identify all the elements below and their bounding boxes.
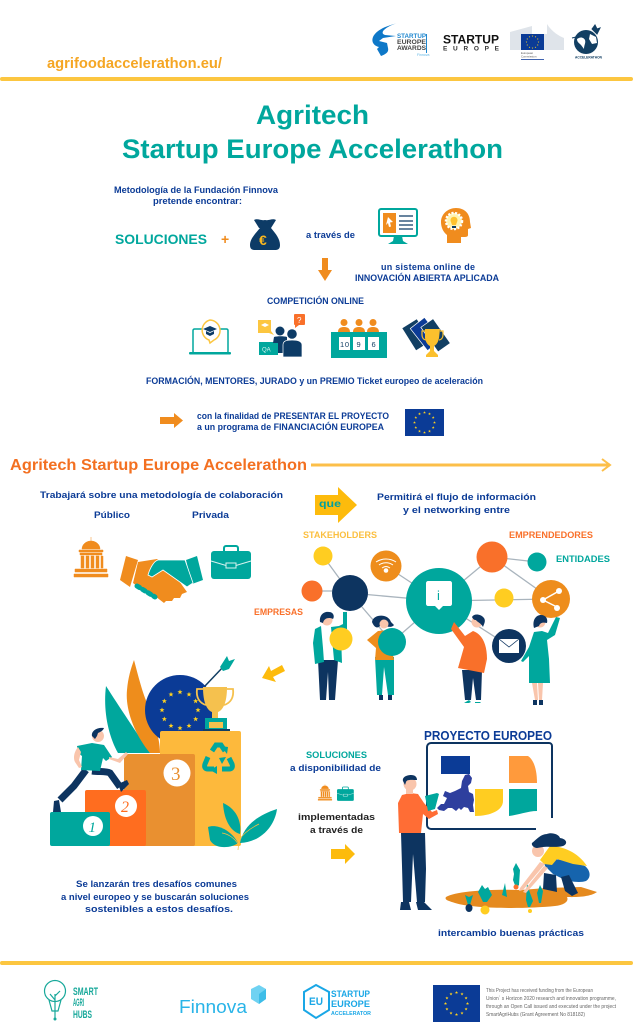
node: mail (492, 629, 526, 663)
person: man in orange (451, 614, 487, 703)
node: share (532, 580, 570, 618)
logo: Smart Agri Hubs: HUBS (73, 1009, 92, 1021)
logo: Smart Agri Hubs: SMART (73, 986, 98, 998)
title: Startup Europe Accelerathon (122, 134, 503, 164)
arrow: que: que (319, 498, 341, 510)
icon: EU flag (405, 409, 444, 436)
bottom divider (0, 961, 633, 965)
logo: Startup Europe Awards: EUROPE (397, 39, 426, 46)
icon: handshake (120, 556, 203, 603)
icon: jury scoreboard: 6 (372, 340, 376, 349)
leaf: teal (105, 686, 150, 753)
funding notice: SmartAgriHubs (Grant Agreement No 818182) (486, 1012, 585, 1018)
text: information flow: y el networking entre (403, 505, 510, 515)
funding notice (486, 988, 616, 1018)
text: collaboration methodology (40, 490, 283, 520)
step: 2: 2 (121, 799, 129, 816)
logo: Startup Europe Awards: Finnova (417, 53, 430, 57)
logo: Startup Europe Accelerator: EU (309, 996, 323, 1008)
top divider (0, 77, 633, 81)
icon: trophy with tickets (402, 317, 450, 357)
person: runner (53, 728, 129, 812)
icon: jury scoreboard (331, 319, 387, 358)
header logos (372, 23, 603, 60)
step: 3 (124, 754, 195, 846)
map of Europe (437, 774, 474, 812)
icon: jury scoreboard: 10 (340, 340, 349, 349)
text: information flow (377, 492, 536, 515)
person: gardener (519, 833, 590, 896)
network diagram (302, 542, 570, 663)
logo: European Commission (510, 24, 564, 60)
person: man with yellow circle (313, 612, 352, 700)
node: central information: i (437, 588, 440, 603)
label: public: Público (94, 510, 131, 520)
soil (446, 887, 597, 908)
text: training, mentors, jury, prize: FORMACIÓN, MENTORES, JURADO y un PREMIO Ticket europeo de aceleración (146, 375, 483, 386)
icon: briefcase (211, 546, 251, 579)
arrow: section line (311, 459, 610, 471)
label: emprendedores: EMPRENDEDORES (509, 530, 593, 540)
logo: Smart Agri Hubs (44, 980, 98, 1021)
text: collaboration methodology: Trabajará sobre una metodología de colaboración (40, 490, 283, 500)
text: online innovation system: INNOVACIÓN ABIERTA APLICADA (355, 272, 499, 283)
title (122, 100, 503, 164)
heading: online competition: COMPETICIÓN ONLINE (267, 295, 364, 306)
logo: Accelerathon (572, 25, 603, 60)
text: information flow: Permitirá el flujo de información (377, 492, 536, 502)
logo: Accelerathon: ACCELERATHON (575, 56, 603, 60)
logo: Startup Europe Accelerator: ACCELERATOR (331, 1011, 371, 1017)
intro text: pretende encontrar: (153, 196, 242, 206)
circle: EU (145, 675, 215, 745)
text: solutions available: SOLUCIONES (306, 750, 367, 760)
text: three challenges: Se lanzarán tres desafíos comunes (76, 879, 237, 889)
section heading: Agritech Startup Europe Accelerathon (10, 457, 307, 474)
text: exchange of good practices: intercambio buenas prácticas (438, 928, 584, 938)
tile: yellow (475, 789, 503, 816)
icon: mentors: ? (297, 316, 302, 325)
tile: blue (441, 756, 470, 774)
icon: computer monitor (379, 209, 417, 244)
icon: trophy (197, 687, 233, 731)
text: solutions available (290, 750, 381, 773)
text: online innovation system (355, 262, 499, 283)
icon: capitol building (74, 537, 108, 577)
logo: Startup Europe Accelerator: STARTUP (331, 989, 370, 999)
logo: Startup Europe Awards (372, 23, 430, 57)
icon: jury scoreboard: 9 (356, 340, 361, 349)
text: implemented through: implementadas (298, 812, 375, 822)
icon: mentors (258, 314, 305, 357)
website link: agrifoodaccelerathon.eu/ (47, 55, 223, 72)
title: Agritech (256, 100, 369, 130)
text: three challenges: a nivel europeo y se buscarán soluciones (61, 892, 249, 902)
logo: European Commission: European (521, 51, 534, 55)
arrow: right orange (160, 413, 183, 428)
step: back (160, 731, 241, 846)
icon: money bag (250, 219, 280, 250)
arrow: right yellow (331, 844, 355, 864)
icon: small capitol (318, 784, 332, 800)
text: purpose: con la finalidad de PRESENTAR EL PROYECTO (197, 411, 389, 421)
podium illustration (50, 656, 277, 850)
logo: Startup Europe: EUROPE (443, 46, 500, 52)
icon: money bag: € (259, 232, 267, 248)
soluciones label: SOLUCIONES (115, 232, 207, 247)
text: implemented through (298, 812, 375, 835)
intro text (114, 185, 279, 206)
plants (465, 863, 543, 914)
presentation board (427, 743, 552, 829)
person: woman with teal circle (367, 616, 406, 700)
logo: Startup Europe (443, 32, 500, 52)
icon: head with lightbulb (441, 208, 471, 243)
icon: laptop training (189, 320, 231, 354)
label: entidades: ENTIDADES (556, 554, 610, 564)
person: woman in green dress (521, 615, 560, 705)
arrow: dart (205, 656, 235, 686)
text: online innovation system: un sistema online de (381, 262, 475, 272)
tile: teal (509, 789, 537, 816)
logo: Smart Agri Hubs: AGRI (73, 997, 84, 1009)
node: wifi (370, 550, 402, 582)
node: central information (406, 568, 472, 634)
text: purpose: a un programa de FINANCIACIÓN EUROPEA (197, 421, 384, 432)
label: stakeholders: STAKEHOLDERS (303, 530, 377, 540)
logo: Startup Europe Awards: STARTUP (397, 33, 426, 40)
funding notice: through an Open Call issued and executed under the project (486, 1004, 616, 1010)
icon: recycle (205, 745, 232, 774)
icon: EU flag footer (433, 985, 480, 1022)
node: teal (528, 552, 546, 572)
logo: Finnova (179, 985, 266, 1017)
text: three challenges: sostenibles a estos desafíos. (85, 904, 233, 914)
label: empresas: EMPRESAS (254, 607, 303, 617)
node: yellow right (494, 588, 514, 608)
text: implemented through: a través de (310, 825, 363, 835)
node: orange (302, 580, 322, 602)
funding notice: Union´ s Horizon 2020 research and innovation programme, (486, 996, 616, 1002)
logo: Finnova: Finnova (179, 997, 248, 1017)
plus sign: + (221, 231, 229, 247)
logo: Startup Europe Awards: AWARDS (397, 45, 426, 52)
arrow: down-left yellow (262, 665, 285, 682)
arrow: que (315, 487, 357, 523)
funding notice: This Project has received funding from the European (486, 988, 593, 994)
logo: European Commission: Commission (521, 54, 537, 58)
icon: mentors: QA (262, 348, 271, 354)
node: yellow (314, 546, 332, 566)
text: three challenges (61, 879, 249, 914)
text: a través de: a través de (306, 230, 355, 240)
step: 2 (85, 790, 146, 846)
step: 3: 3 (171, 764, 180, 785)
node: orange large (476, 542, 508, 572)
text: purpose (197, 411, 389, 432)
intro text: Metodología de la Fundación Finnova (114, 185, 279, 195)
icon: small briefcase (337, 787, 354, 801)
arrow: down (318, 258, 332, 281)
node: navy (332, 575, 368, 611)
leaf: orange (127, 660, 160, 753)
text: solutions available: a disponibilidad de (290, 763, 381, 773)
logo: Startup Europe Accelerator (304, 985, 371, 1018)
label: private: Privada (192, 510, 230, 520)
heading: european project: PROYECTO EUROPEO (424, 729, 552, 743)
icon: plant (208, 803, 277, 850)
logo: Startup Europe: STARTUP (443, 32, 499, 46)
step: 1 (50, 812, 110, 846)
person: presenter (398, 775, 439, 910)
logo: Startup Europe Accelerator: EUROPE (331, 999, 370, 1009)
step: 1: 1 (88, 820, 96, 836)
tile: orange (509, 756, 537, 783)
